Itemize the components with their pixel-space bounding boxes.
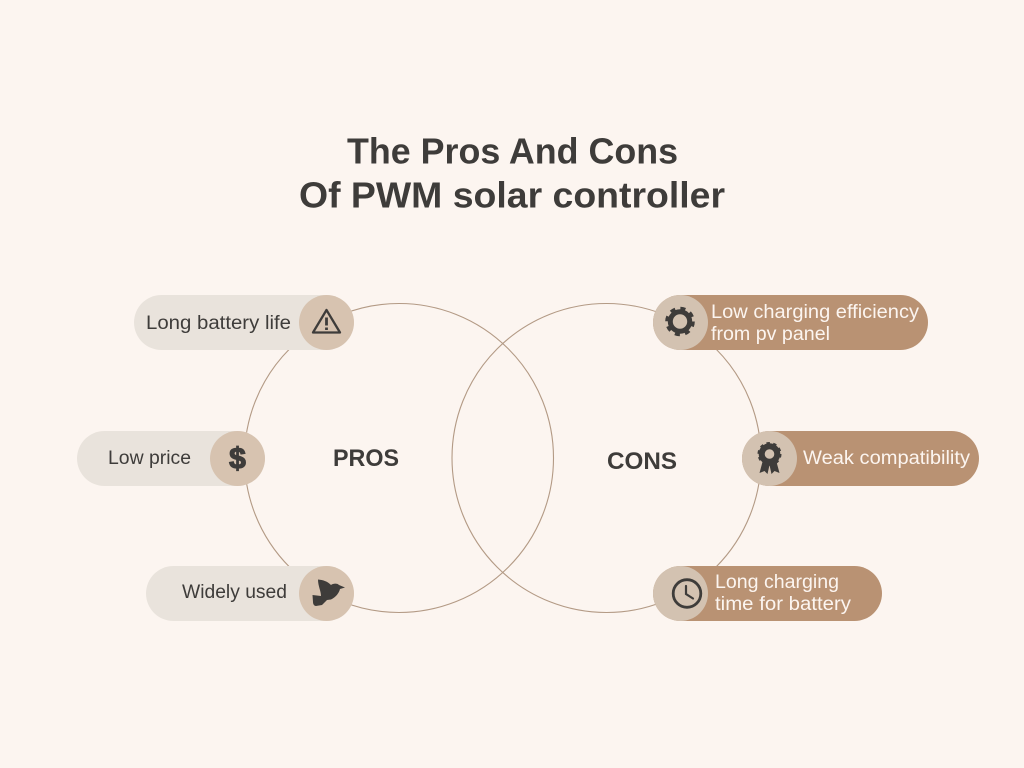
circle: pros [244,304,554,612]
icon: award ribbon [758,443,780,474]
icon: gear [667,308,693,334]
pill: widely used [146,566,354,621]
pill: widely used: Widely used [182,582,287,603]
pill: low charging efficiency [653,295,928,350]
pill: long battery life [134,295,354,350]
pill: low charging efficiency: Low charging efficiency [711,302,920,323]
label: PROS: PROS [333,445,399,472]
title: Of PWM solar controller [299,174,725,216]
pill: long battery life: Long battery life [146,313,291,334]
icon: dollar sign: $ [229,442,246,476]
icon: clock [673,580,701,607]
title: The Pros And Cons [347,130,678,172]
title [299,130,725,216]
icon: dove [312,580,345,606]
pill: long charging time: time for battery [715,594,852,615]
pill: weak compatibility: Weak compatibility [803,448,971,469]
circle: cons [452,304,761,612]
pill: long charging time [653,566,882,621]
pill: low charging efficiency: from pv panel [711,324,830,345]
pill: weak compatibility [742,431,979,486]
pill: low price [77,431,265,486]
label: CONS: CONS [607,448,677,475]
pill: low price: Low price [108,448,191,469]
icon: warning triangle [313,310,340,332]
pill: long charging time: Long charging [715,572,839,593]
